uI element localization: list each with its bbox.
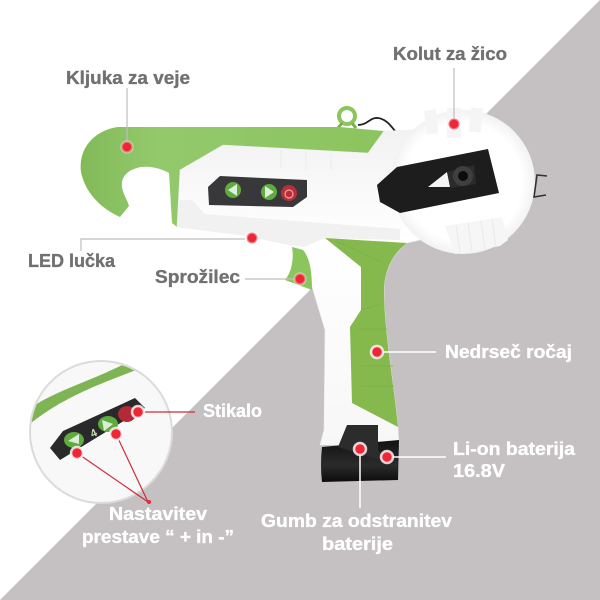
battery (321, 440, 399, 482)
label: Gumb za odstranitev baterije: baterije (322, 534, 393, 554)
product: rebar tying tool (81, 107, 547, 482)
label: LED lučka: LED lučka (28, 251, 116, 271)
label: Gumb za odstranitev baterije (261, 511, 452, 554)
inset magnified control panel (25, 361, 172, 503)
label: Gumb za odstranitev baterije: Gumb za odstranitev (261, 511, 452, 531)
wire reel disc (391, 107, 535, 254)
inset buttons: 4 (89, 427, 100, 441)
hanging ring and wire (338, 108, 395, 131)
label: Kolut za žico: Kolut za žico (393, 44, 507, 64)
label: Li-on baterija 16.8V: Li-on baterija (453, 439, 576, 459)
label: Li-on baterija 16.8V: 16.8V (453, 461, 505, 481)
inset dark panel (50, 398, 145, 460)
green hook housing (81, 127, 384, 227)
trigger (285, 247, 312, 290)
label: Nastavitev prestave (82, 504, 234, 547)
black plate with lens (377, 149, 499, 213)
battery release button (338, 425, 386, 462)
control panel (208, 176, 307, 207)
green grip (325, 238, 407, 427)
label: Nastavitev prestave: Nastavitev (109, 504, 207, 524)
white gun body (177, 130, 420, 445)
label: Nedrseč ročaj: Nedrseč ročaj (445, 342, 572, 362)
inset green stripe (32, 365, 134, 422)
wire clip (534, 175, 547, 197)
leader lines (77, 68, 454, 508)
body ribs (281, 150, 331, 170)
label: Sprožilec: Sprožilec (155, 267, 240, 287)
marker dots (71, 118, 460, 504)
body lower shading (177, 200, 400, 247)
label: Li-on baterija 16.8V (453, 439, 576, 481)
label: Stikalo: Stikalo (203, 401, 262, 421)
inset buttons (64, 406, 136, 448)
label: Nastavitev prestave: prestave “ + in -” (82, 527, 234, 547)
label: Kljuka za veje: Kljuka za veje (66, 68, 190, 88)
